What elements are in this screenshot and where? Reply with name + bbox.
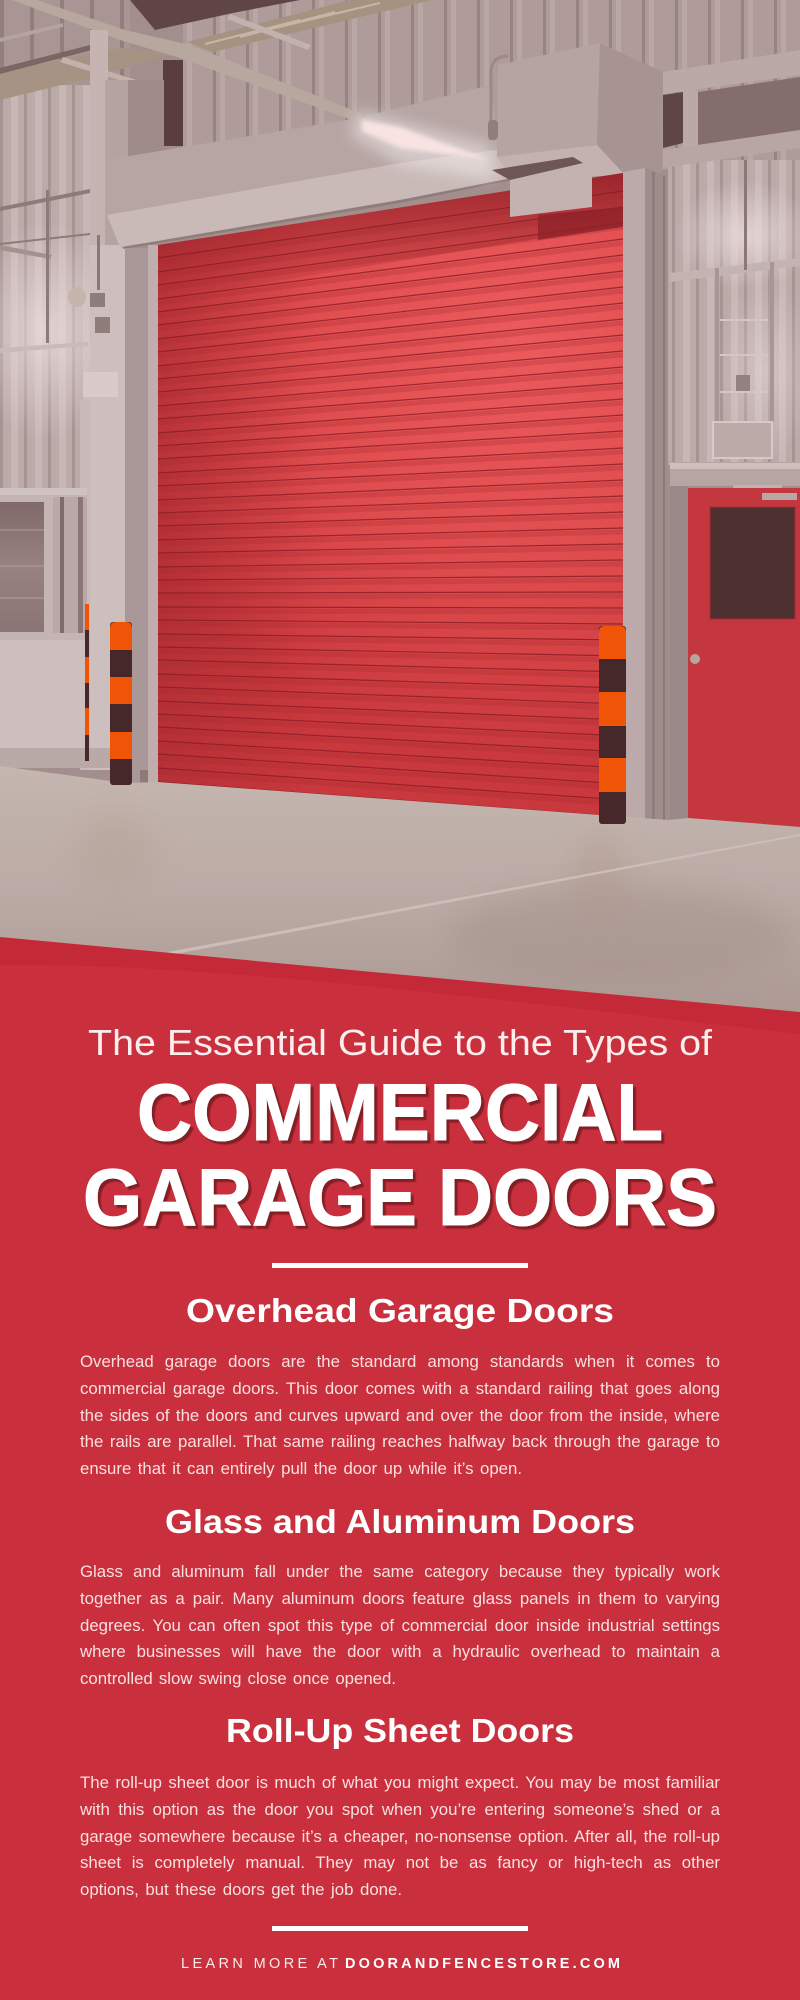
text block: glass and aluminum doors: controlled slow swing close once opened. [80,1669,396,1688]
left window [0,488,87,640]
title: subtitle line: The Essential Guide to the Types of [88,1022,713,1063]
column [80,30,164,770]
shadow below box [538,207,623,240]
right wall with lit corrugation [668,160,800,465]
door knob [690,654,700,664]
bollard: right [599,626,626,824]
right upper band and dark windows [663,50,800,168]
divider [272,1263,528,1268]
door jambs [125,168,668,820]
text block: roll-up sheet doors: options, but these doors get the job done. [80,1880,402,1899]
text block: roll-up sheet doors [80,1773,720,1899]
text block: overhead garage doors [80,1352,720,1478]
upper left wall [0,0,130,90]
backing wall [0,0,800,835]
bollard: left [110,622,132,785]
light fixture glow [350,110,495,180]
floor [0,766,800,1020]
door window [710,507,795,619]
divider [272,1926,528,1931]
text block: overhead garage doors: the sides of the doors and curves upward and over the door from the inside, where [80,1406,720,1425]
text block: overhead garage doors: ensure that it can entirely pull the door up while it’s open. [80,1459,522,1478]
photo: warehouse interior with red roll-up door [0,0,800,1020]
upper wall corrugation [183,0,800,170]
title: main heading: COMMERCIAL [137,1068,663,1158]
red roll-up door [158,173,623,817]
door slats: dark grooves [158,191,623,817]
text block: overhead garage doors: Overhead garage doors are the standard among standards when it comes to [80,1352,720,1371]
text block: roll-up sheet doors: garage somewhere because it’s a cheaper, no-nonsense option. After all, the roll-up [80,1827,720,1846]
text block: glass and aluminum doors: where businesses will have the door with a hydraulic overhead to maintain a [80,1642,720,1661]
title: main heading: GARAGE DOORS [83,1153,717,1243]
panel: red slanted content background [0,937,800,2000]
text block: overhead garage doors: the rails are parallel. That same railing reaches halfway back through the garage to [80,1432,720,1451]
door top shade [158,173,623,300]
text block: glass and aluminum doors [80,1562,720,1688]
text block: glass and aluminum doors: Glass and aluminum fall under the same category because they typically work [80,1562,720,1581]
left corrugated wall [0,85,120,490]
text block: roll-up sheet doors: with this option as the door you spot when you’re entering someone’s shed or a [80,1800,720,1819]
title: main heading [83,1068,717,1243]
heading: glass and aluminum doors: Glass and Aluminum Doors [165,1503,635,1540]
heading: roll-up sheet doors: Roll-Up Sheet Doors [226,1712,574,1749]
red exit door [688,485,800,827]
soffit header above door [105,85,512,249]
heater unit [488,43,663,180]
slot and box on door top [492,157,592,217]
door closer [733,485,782,488]
footer: DOORANDFENCESTORE.COM [345,1956,620,1972]
text block: roll-up sheet doors: sheet is completely manual. They may not be as fancy or high-tech as other [80,1853,720,1872]
footer: LEARN MORE AT [181,1956,338,1972]
heading: overhead garage doors: Overhead Garage Doors [186,1292,614,1329]
right wall electrical box and ladder [713,320,772,458]
door slats: shade bands [158,195,623,804]
wall equipment: speaker and boxes [68,235,118,397]
text block: glass and aluminum doors: degrees. You can often spot this type of commercial door inside industrial settings [80,1616,720,1635]
dark gap behind beam [163,60,183,146]
frame above exit door [670,462,800,820]
left wall base [0,640,125,768]
ceiling trusses [0,0,432,122]
footer [181,1956,620,1972]
text block: roll-up sheet doors: The roll-up sheet door is much of what you might expect. You may be most familiar [80,1773,720,1792]
text block: overhead garage doors: commercial garage doors. This door comes with a standard railing that goes along [80,1379,720,1398]
bollard: far left small [85,604,89,761]
text block: glass and aluminum doors: together as a pair. Many aluminum doors feature glass panels in them to varying [80,1589,720,1608]
